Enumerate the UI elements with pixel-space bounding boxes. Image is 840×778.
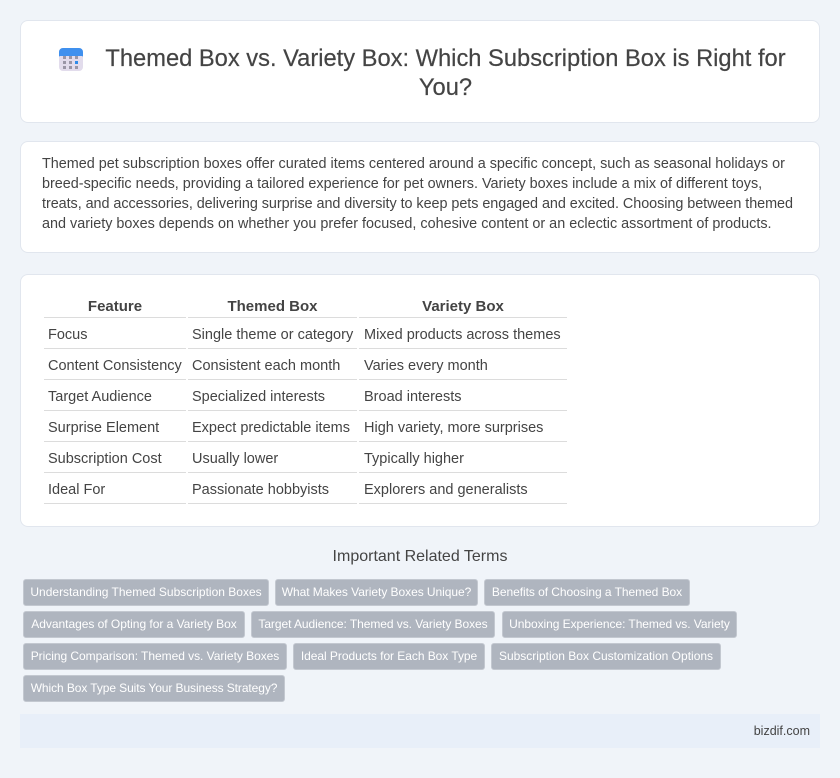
tag: What Makes Variety Boxes Unique?	[282, 585, 471, 599]
row: focus	[48, 327, 561, 343]
tag	[23, 611, 245, 638]
row: target audience	[48, 389, 462, 405]
tag	[502, 611, 737, 638]
related terms tags	[23, 579, 737, 702]
title: Themed Box vs. Variety Box: Which Subscription Box is Right for You?	[105, 46, 786, 100]
tag: Unboxing Experience: Themed vs. Variety	[509, 617, 730, 631]
heading: related terms: Important Related Terms	[333, 548, 507, 565]
tag: Target Audience: Themed vs. Variety Boxes	[258, 617, 488, 631]
row: subscription cost	[48, 451, 464, 467]
text block: introduction: breed-specific needs, providing a tailored experience for pet owners. Variety boxes include a mix of different toys,	[42, 176, 762, 192]
table header row: Variety Box	[422, 298, 504, 315]
row: subscription cost: Typically higher	[364, 451, 464, 467]
row: ideal for: Ideal For	[48, 482, 105, 498]
tag: Ideal Products for Each Box Type	[301, 649, 477, 663]
row: ideal for: Explorers and generalists	[364, 482, 528, 498]
footer text: source: bizdif.com	[754, 724, 810, 738]
tag	[275, 579, 478, 606]
panel: introduction	[20, 141, 820, 253]
row: content consistency	[48, 358, 488, 374]
panel: comparison table	[20, 274, 820, 527]
row: subscription cost: Usually lower	[192, 451, 278, 467]
tag	[23, 675, 285, 702]
tag: Understanding Themed Subscription Boxes	[30, 585, 262, 599]
tag: Pricing Comparison: Themed vs. Variety Boxes	[31, 649, 279, 663]
row: target audience: Broad interests	[364, 389, 462, 405]
tag: Subscription Box Customization Options	[499, 649, 713, 663]
tag: Benefits of Choosing a Themed Box	[492, 585, 682, 599]
row: target audience: Specialized interests	[192, 389, 325, 405]
tag: Advantages of Opting for a Variety Box	[31, 617, 237, 631]
row: content consistency: Consistent each month	[192, 358, 340, 374]
row: content consistency: Varies every month	[364, 358, 488, 374]
text block: introduction: treats, and accessories, delivering surprise and diversity to keep pets engaged and excited. Choosing between themed	[42, 196, 793, 212]
table	[44, 298, 567, 504]
row: surprise element: Surprise Element	[48, 420, 159, 436]
table header row: Themed Box	[227, 298, 318, 315]
tag	[491, 643, 721, 670]
row: ideal for: Passionate hobbyists	[192, 482, 329, 498]
tag: Which Box Type Suits Your Business Strategy?	[31, 681, 277, 695]
tag	[293, 643, 485, 670]
panel: header	[20, 20, 820, 123]
footer	[20, 714, 820, 748]
tag	[23, 579, 269, 606]
text block: introduction: Themed pet subscription boxes offer curated items centered around a specific concept, such as seasonal holidays or	[42, 156, 785, 172]
row: subscription cost: Subscription Cost	[48, 451, 162, 467]
table header row: Feature	[88, 298, 142, 315]
row: ideal for	[48, 482, 528, 498]
tag	[23, 643, 287, 670]
table header row	[88, 298, 504, 315]
icon: calendar	[59, 48, 83, 71]
row: surprise element: High variety, more surprises	[364, 420, 543, 436]
row: focus: Mixed products across themes	[364, 327, 561, 343]
tag	[251, 611, 495, 638]
text block: introduction	[42, 156, 793, 232]
row: focus: Single theme or category	[192, 327, 353, 343]
row: surprise element: Expect predictable items	[192, 420, 350, 436]
tag	[484, 579, 690, 606]
row: target audience: Target Audience	[48, 389, 152, 405]
row: content consistency: Content Consistency	[48, 358, 182, 374]
row: surprise element	[48, 420, 543, 436]
row: focus: Focus	[48, 327, 88, 343]
text block: introduction: and variety boxes depends on whether you prefer focused, cohesive content or an eclectic assortment of products.	[42, 216, 772, 232]
